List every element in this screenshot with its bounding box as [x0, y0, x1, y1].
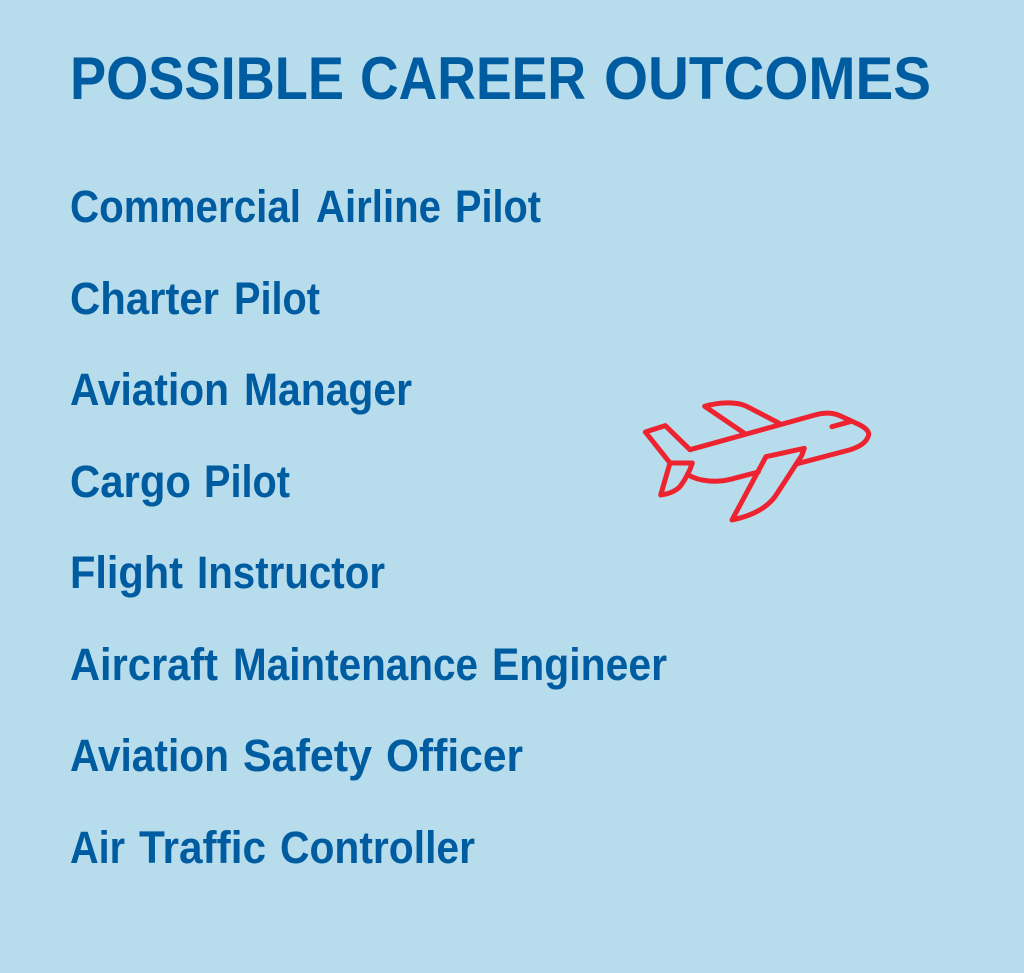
- career: Flight Instructor: Flight: [70, 547, 183, 598]
- career: Aviation Safety Officer: Safety: [243, 730, 372, 781]
- icon: red airplane outline: [645, 403, 869, 520]
- career: Aviation Manager: Aviation: [70, 364, 229, 415]
- cockpit line: [832, 422, 850, 427]
- career: Air Traffic Controller: Air: [70, 822, 125, 873]
- career: Air Traffic Controller: Traffic: [139, 822, 266, 873]
- career: Flight Instructor: Instructor: [197, 547, 385, 598]
- career: Commercial Airline Pilot: Pilot: [455, 181, 541, 232]
- fuselage top and nose: [690, 413, 869, 464]
- title: CAREER: [360, 45, 586, 112]
- career list: [70, 181, 667, 873]
- career: Charter Pilot: Pilot: [234, 273, 320, 324]
- career: Charter Pilot: Charter: [70, 273, 219, 324]
- fuselage belly: [687, 472, 758, 481]
- title: OUTCOMES: [604, 45, 931, 112]
- tailplane: [661, 463, 692, 495]
- title: POSSIBLE: [70, 45, 344, 112]
- career: Aviation Safety Officer: Officer: [386, 730, 523, 781]
- tail fin: [645, 426, 690, 463]
- career: Air Traffic Controller: Controller: [280, 822, 475, 873]
- career: Aviation Manager: Manager: [244, 364, 412, 415]
- career: Aircraft Maintenance Engineer: Maintenance: [233, 639, 478, 690]
- career: Aviation Safety Officer: Aviation: [70, 730, 229, 781]
- career: Aircraft Maintenance Engineer: Engineer: [492, 639, 667, 690]
- career: Aircraft Maintenance Engineer: Aircraft: [70, 639, 218, 690]
- upper wing: [705, 403, 779, 434]
- career: Cargo Pilot: Cargo: [70, 456, 191, 507]
- career: Commercial Airline Pilot: Airline: [316, 181, 441, 232]
- lower wing: [732, 448, 804, 520]
- career: Cargo Pilot: Pilot: [204, 456, 290, 507]
- career: Commercial Airline Pilot: Commercial: [70, 181, 301, 232]
